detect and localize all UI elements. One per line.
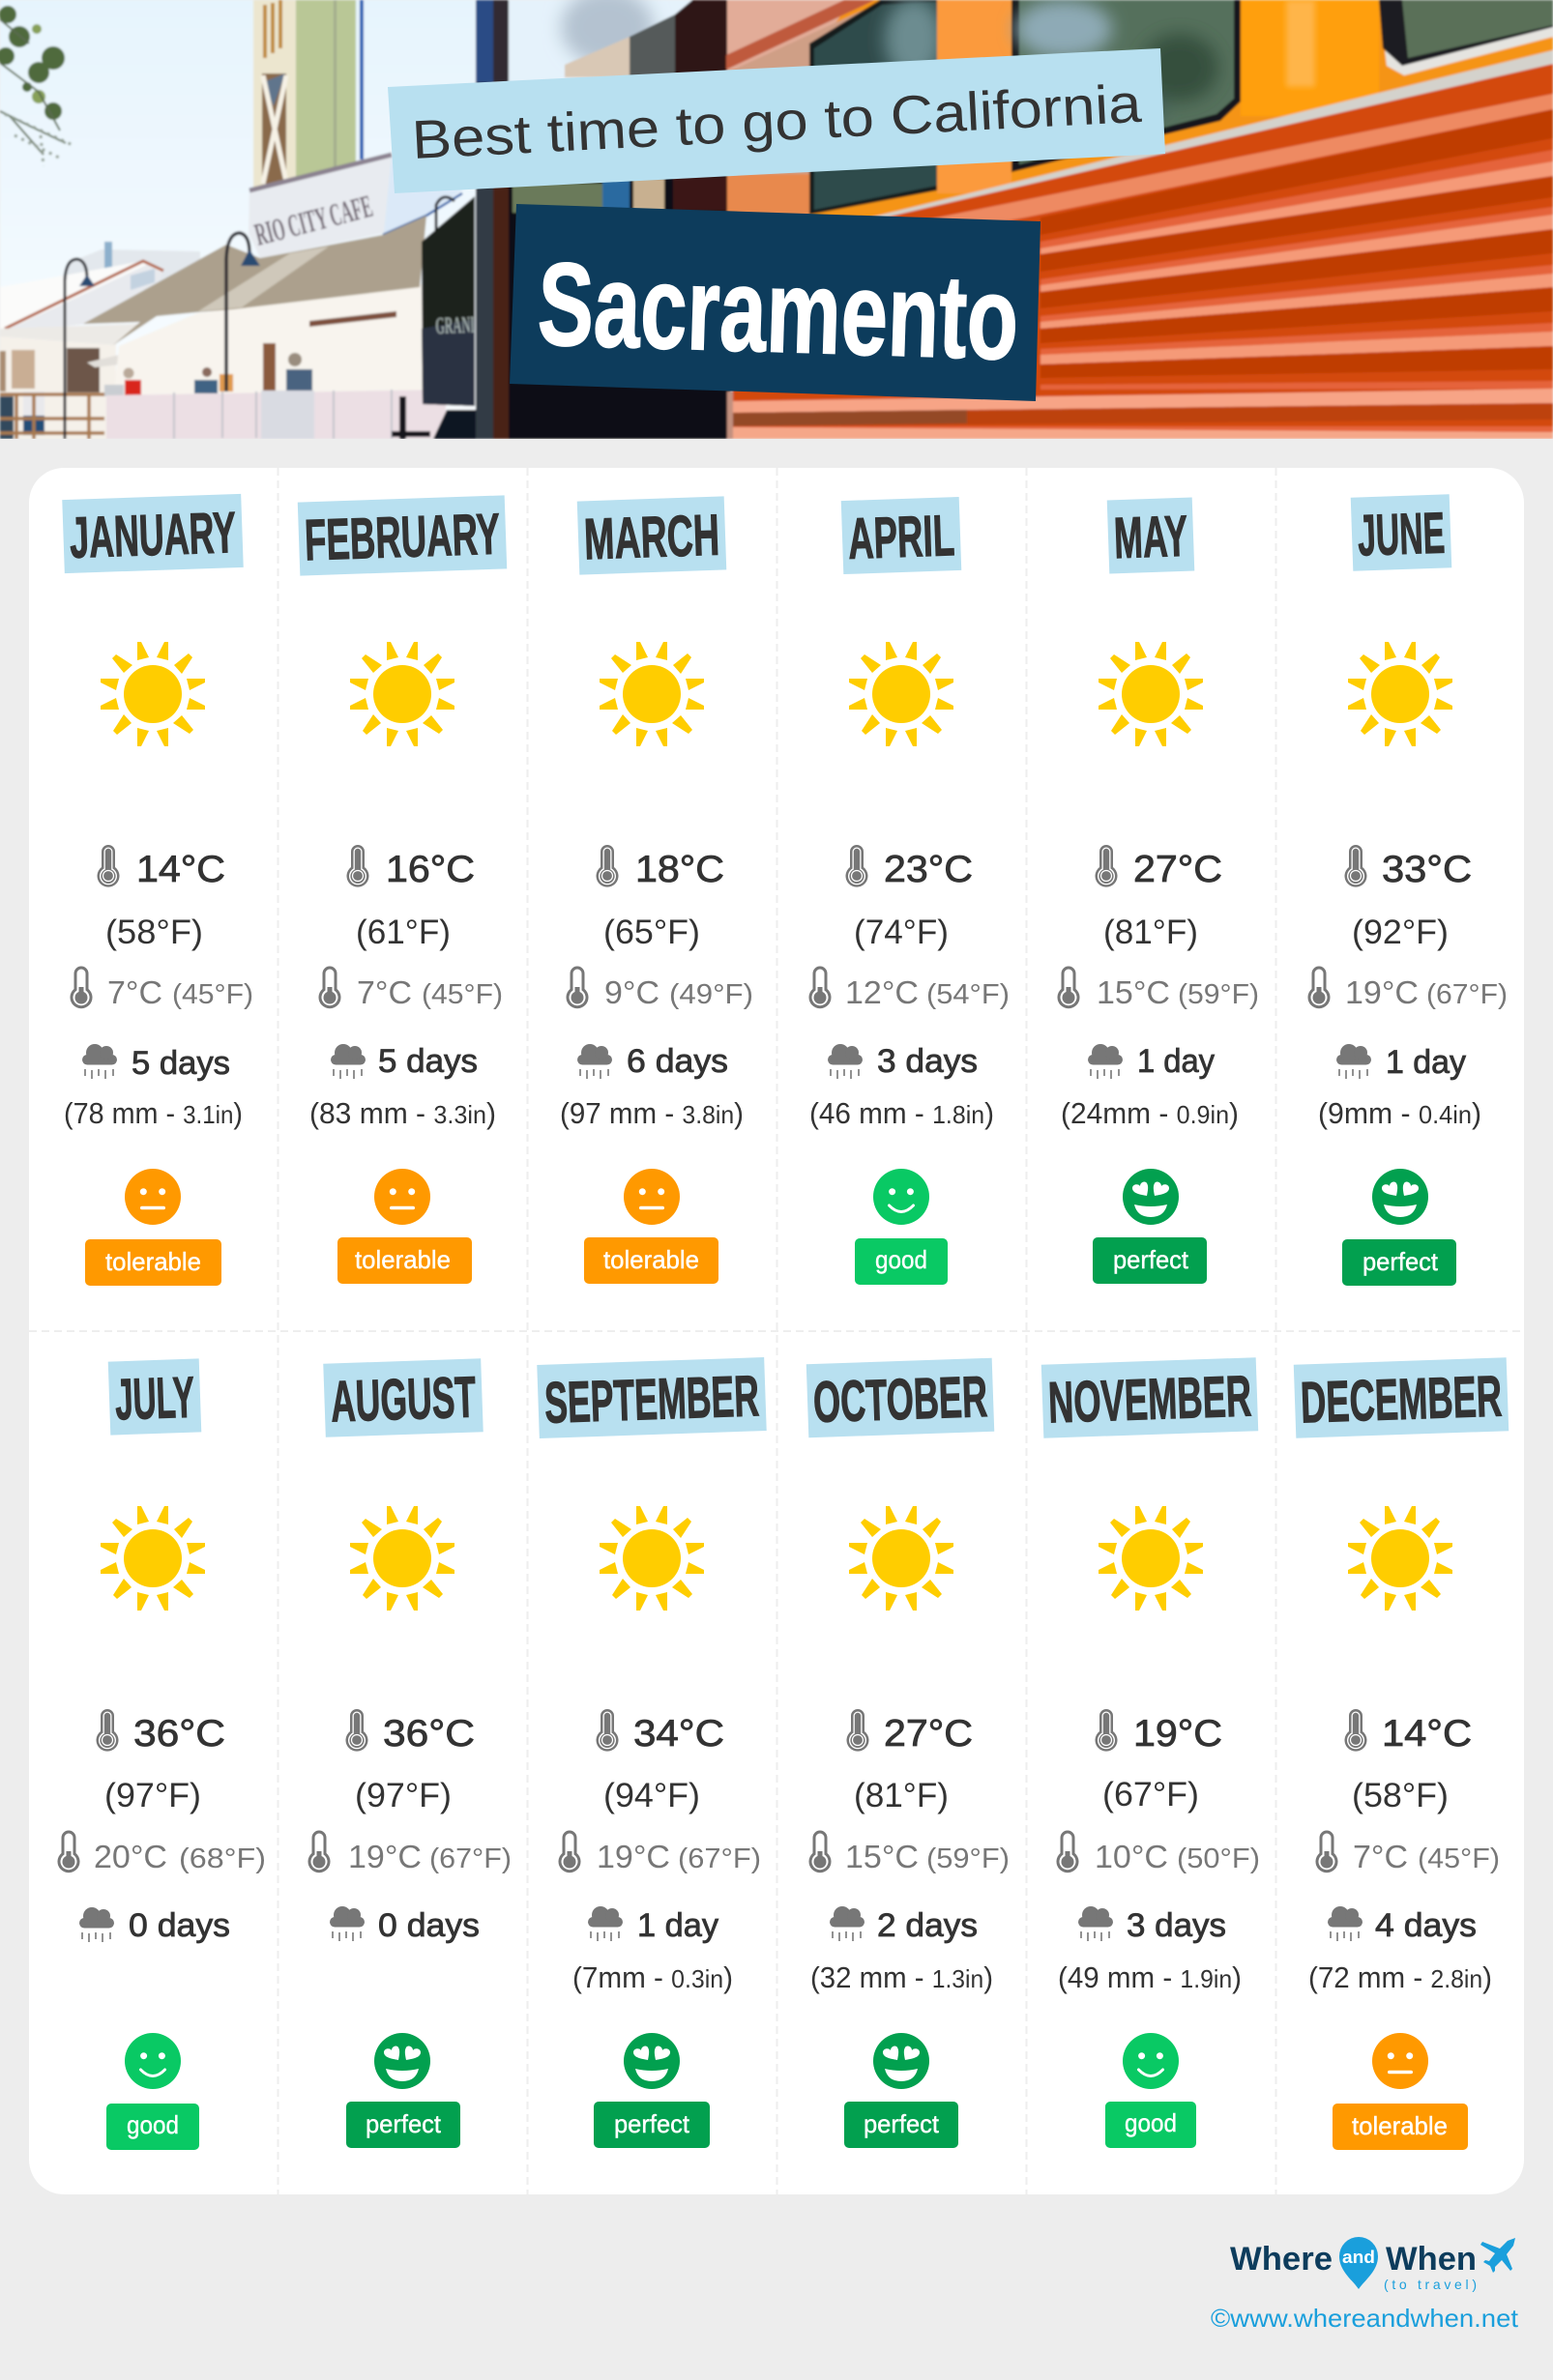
month panel: June: 33°C bbox=[1382, 849, 1472, 890]
month panel: July: (97°F) bbox=[104, 1777, 201, 1814]
title banner: Sacramento bbox=[510, 204, 1040, 401]
month panel: January: tolerable bbox=[105, 1247, 201, 1276]
month panel: April: (54°F) bbox=[926, 979, 1010, 1010]
month panel: January bbox=[62, 494, 253, 1286]
month panel: November: 10°C bbox=[1095, 1839, 1168, 1874]
month panel: August: (67°F) bbox=[429, 1843, 512, 1874]
month panel: September: (67°F) bbox=[678, 1843, 761, 1874]
month panel: September: 34°C bbox=[633, 1713, 724, 1755]
panel: calendar card bbox=[29, 468, 1524, 2194]
month panel: December: (45°F) bbox=[1418, 1843, 1500, 1874]
month panel: March: (97 mm - 3.8in) bbox=[560, 1096, 744, 1130]
logo: Where and When (to travel): When bbox=[1386, 2241, 1477, 2278]
month panel: August: (97°F) bbox=[355, 1777, 452, 1814]
month panel: August: 19°C bbox=[348, 1839, 422, 1874]
month panel: February: 7°C bbox=[357, 974, 412, 1010]
month panel: May: (24mm - 0.9in) bbox=[1061, 1096, 1239, 1130]
month panel: February: FEBRUARY bbox=[304, 502, 501, 572]
month panel: September: (7mm - 0.3in) bbox=[572, 1960, 733, 1994]
month panel: November: (49 mm - 1.9in) bbox=[1058, 1960, 1242, 1994]
logo: Where and When (to travel): Where bbox=[1230, 2241, 1333, 2278]
month panel: April: 23°C bbox=[884, 849, 973, 890]
month panel: January: (45°F) bbox=[172, 979, 253, 1010]
month panel: April: good bbox=[875, 1245, 927, 1274]
month panel: June bbox=[1307, 494, 1508, 1286]
month panel: January: JANUARY bbox=[69, 500, 237, 570]
month panel: February: 5 days bbox=[378, 1043, 478, 1080]
month panel: March: tolerable bbox=[603, 1245, 699, 1274]
month panel: November: 19°C bbox=[1133, 1713, 1222, 1755]
month panel: August: 0 days bbox=[378, 1907, 480, 1944]
month panel: August bbox=[308, 1358, 512, 2148]
month panel: February: (45°F) bbox=[422, 979, 503, 1010]
month panel: December: 14°C bbox=[1382, 1713, 1472, 1755]
title banner: Best time to go to California: Best time to go to California bbox=[410, 73, 1144, 170]
logo: Where and When (to travel): (to travel) bbox=[1384, 2277, 1477, 2292]
month panel: June: (67°F) bbox=[1426, 979, 1508, 1010]
month panel: April: APRIL bbox=[847, 503, 955, 571]
title banner: Best time to go to California bbox=[388, 48, 1165, 193]
month panel: June: (9mm - 0.4in) bbox=[1318, 1096, 1481, 1130]
month panel: December bbox=[1294, 1357, 1509, 2150]
month panel: February: 16°C bbox=[386, 849, 475, 890]
month panel: August: AUGUST bbox=[330, 1364, 477, 1435]
month panel: December: 4 days bbox=[1375, 1907, 1477, 1944]
month panel: May: 27°C bbox=[1133, 849, 1222, 890]
month panel: March: (49°F) bbox=[669, 979, 753, 1010]
month panel: February: (61°F) bbox=[356, 914, 451, 951]
month panel: January: 5 days bbox=[132, 1045, 230, 1082]
month panel: April: (46 mm - 1.8in) bbox=[809, 1096, 994, 1130]
month panel: September: SEPTEMBER bbox=[543, 1363, 760, 1436]
hero photo: Sacramento old town and train bbox=[0, 0, 1553, 439]
month panel: October: OCTOBER bbox=[812, 1364, 988, 1435]
month panel: October: (59°F) bbox=[926, 1843, 1010, 1874]
month panel: December: 7°C bbox=[1353, 1839, 1408, 1874]
month panel: May: 15°C bbox=[1097, 974, 1170, 1010]
month panel: April: 12°C bbox=[845, 974, 919, 1010]
month panel: March: 6 days bbox=[627, 1043, 728, 1080]
month panel: November: good bbox=[1125, 2108, 1177, 2137]
hero photo: Sacramento old town and train: GRANI bbox=[435, 313, 475, 339]
month panel: December: (58°F) bbox=[1352, 1777, 1449, 1814]
month panel: May: MAY bbox=[1113, 504, 1188, 570]
month panel: June: (92°F) bbox=[1352, 914, 1449, 951]
month panel: January: 7°C bbox=[107, 974, 162, 1010]
month panel: January: 14°C bbox=[136, 849, 225, 890]
month panel: October: 15°C bbox=[845, 1839, 919, 1874]
month panel: July: (68°F) bbox=[179, 1843, 266, 1874]
month panel: October: 27°C bbox=[884, 1713, 973, 1755]
month panel: October: (32 mm - 1.3in) bbox=[810, 1960, 993, 1994]
month panel: January: (58°F) bbox=[105, 914, 203, 951]
month panel: July: JULY bbox=[114, 1365, 195, 1432]
month panel: June: 1 day bbox=[1386, 1044, 1466, 1081]
month panel: June: perfect bbox=[1363, 1247, 1439, 1276]
month panel: September: 19°C bbox=[597, 1839, 670, 1874]
month panel: December: (72 mm - 2.8in) bbox=[1308, 1960, 1492, 1994]
hero photo: Sacramento old town and train: RIO CITY CAFE bbox=[251, 189, 376, 253]
month panel: March: (65°F) bbox=[603, 914, 700, 951]
month panel: August: perfect bbox=[366, 2109, 442, 2138]
logo: Where and When (to travel): and bbox=[1342, 2248, 1375, 2267]
month panel: April bbox=[808, 497, 1010, 1285]
month panel: January: (78 mm - 3.1in) bbox=[64, 1096, 243, 1130]
month panel: October bbox=[806, 1358, 1010, 2148]
month panel: April: 3 days bbox=[877, 1043, 978, 1080]
title banner: Sacramento: Sacramento bbox=[536, 238, 1020, 385]
month panel: March bbox=[560, 496, 753, 1284]
month panel: November: NOVEMBER bbox=[1047, 1363, 1252, 1436]
month panel: October: 2 days bbox=[877, 1907, 978, 1944]
month panel: November: (50°F) bbox=[1177, 1843, 1260, 1874]
month panel: July: 0 days bbox=[129, 1907, 230, 1944]
month panel: October: perfect bbox=[864, 2109, 940, 2138]
month panel: July: 20°C bbox=[94, 1839, 167, 1874]
month panel: September: 1 day bbox=[637, 1907, 718, 1944]
month panel: June: JUNE bbox=[1357, 500, 1446, 568]
month panel: February: tolerable bbox=[355, 1245, 451, 1274]
month panel: December: tolerable bbox=[1352, 2111, 1448, 2140]
month panel: May: (81°F) bbox=[1103, 914, 1198, 951]
month panel: May: 1 day bbox=[1137, 1043, 1215, 1080]
month panel: July: 36°C bbox=[133, 1713, 225, 1755]
month panel: September: (94°F) bbox=[603, 1777, 700, 1814]
month panel: March: 9°C bbox=[604, 974, 659, 1010]
month panel: October: (81°F) bbox=[854, 1777, 949, 1814]
month panel: August: 36°C bbox=[383, 1713, 475, 1755]
month panel: May bbox=[1058, 498, 1259, 1284]
website credit: ©www.whereandwhen.net bbox=[1211, 2304, 1519, 2333]
month panel: September: perfect bbox=[614, 2109, 690, 2138]
month panel: November: (67°F) bbox=[1102, 1776, 1199, 1814]
month panel: February bbox=[298, 495, 507, 1284]
month panel: June: 19°C bbox=[1345, 974, 1419, 1010]
month panel: May: (59°F) bbox=[1178, 979, 1259, 1010]
month panel: February: (83 mm - 3.3in) bbox=[309, 1096, 496, 1130]
month panel: November bbox=[1041, 1357, 1260, 2148]
month panel: November: 3 days bbox=[1127, 1907, 1226, 1944]
month panel: July bbox=[58, 1358, 266, 2150]
month panel: July: good bbox=[127, 2110, 179, 2139]
month panel: September bbox=[537, 1357, 767, 2148]
logo: Where and When (to travel) bbox=[1230, 2237, 1515, 2292]
month panel: March: MARCH bbox=[583, 503, 720, 571]
month panel: May: perfect bbox=[1113, 1245, 1189, 1274]
month panel: March: 18°C bbox=[635, 849, 724, 890]
month panel: April: (74°F) bbox=[854, 914, 949, 951]
